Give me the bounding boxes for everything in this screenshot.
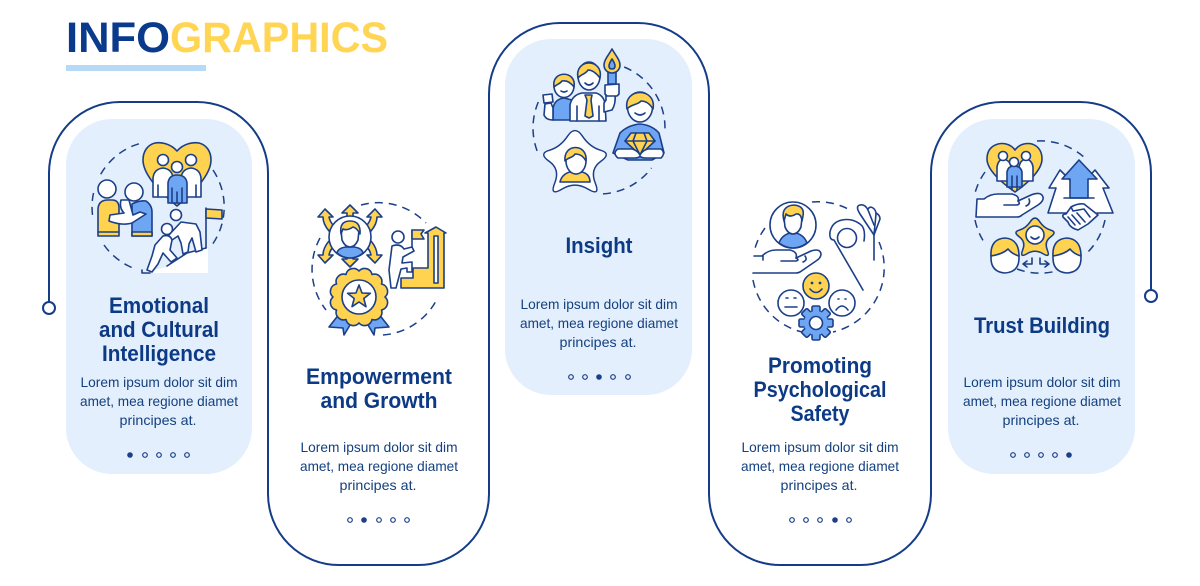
panel: empowerment and growth (300, 203, 458, 523)
body text: principes at. (340, 477, 416, 493)
body text: Lorem ipsum dolor sit dim (742, 439, 898, 455)
icon: people, heart and climbers (92, 143, 224, 273)
end node (1145, 290, 1157, 302)
body text (300, 439, 458, 493)
icon: heart, hand, handshake, arrows and faces (975, 141, 1113, 273)
heading: Emotional (109, 293, 209, 318)
title: INFO (66, 14, 170, 62)
heading: Insight (566, 233, 633, 258)
body text: principes at. (1002, 412, 1080, 428)
panel: promoting psychological safety (741, 202, 899, 523)
body text: Lorem ipsum dolor sit dim (80, 374, 238, 390)
body text: Lorem ipsum dolor sit dim (520, 296, 678, 312)
panel: insight (520, 49, 678, 380)
heading (754, 353, 886, 426)
start node (43, 302, 55, 314)
heading: Empowerment (306, 364, 453, 389)
heading: Intelligence (102, 341, 216, 366)
heading: and Growth (320, 388, 438, 413)
pagination dots (127, 452, 189, 458)
pagination dots (790, 517, 851, 523)
body text: Lorem ipsum dolor sit dim (964, 374, 1120, 390)
heading (306, 364, 453, 413)
title (66, 14, 388, 62)
body text: amet, mea regione diamet (520, 315, 678, 331)
body text: amet, mea regione diamet (80, 393, 238, 409)
panel: emotional and cultural intelligence (80, 143, 238, 458)
icon: team, torch, gem and star (533, 49, 665, 194)
title: GRAPHICS (170, 14, 388, 62)
body text: principes at. (120, 412, 196, 428)
body text: amet, mea regione diamet (963, 393, 1121, 409)
heading: and Cultural (99, 317, 219, 342)
body text (520, 296, 678, 350)
panel backgrounds (66, 39, 1135, 474)
pagination dots (348, 517, 409, 523)
icon: person, arrows, medal, stairs (312, 203, 446, 335)
panel: trust building (963, 141, 1121, 458)
body text (741, 439, 899, 493)
body text: amet, mea regione diamet (741, 458, 899, 474)
heading (99, 293, 219, 366)
heading: Promoting (768, 353, 872, 378)
pagination dots (569, 374, 630, 380)
heading: Trust Building (974, 313, 1110, 338)
heading: Safety (790, 401, 850, 426)
body text: amet, mea regione diamet (300, 458, 458, 474)
body text: Lorem ipsum dolor sit dim (300, 439, 458, 455)
body text (80, 374, 238, 428)
body text: principes at. (780, 477, 858, 493)
title underline (66, 65, 206, 71)
body text (963, 374, 1121, 428)
body text: principes at. (560, 334, 636, 350)
heading: Psychological (754, 377, 886, 402)
pagination dots (1011, 452, 1072, 458)
icon: person in hand, ok gesture, moods, gear (753, 202, 884, 340)
